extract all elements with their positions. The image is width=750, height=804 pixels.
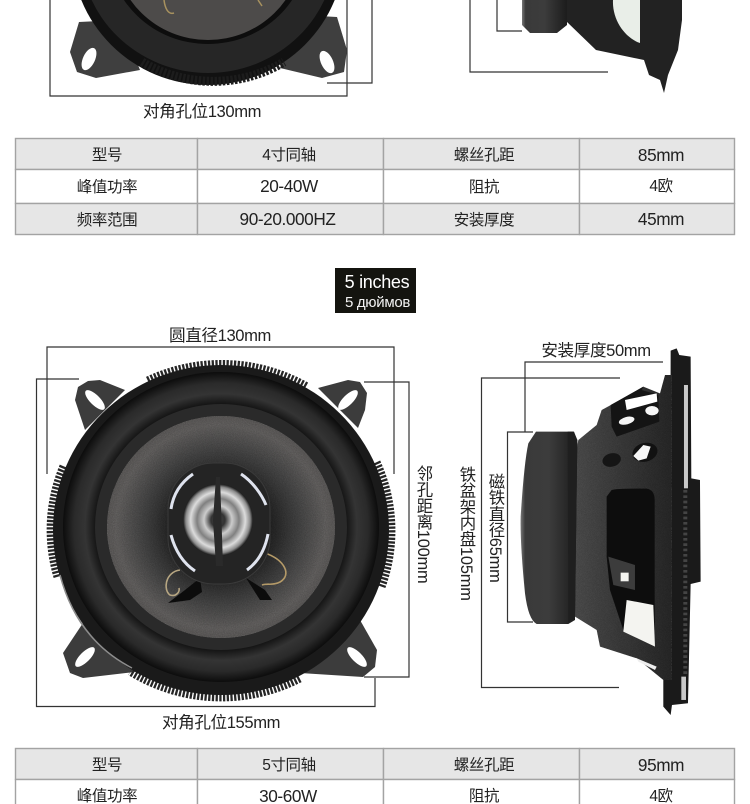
label: 对角孔位155mm: 对角孔位155mm [162,713,280,732]
icon: flange highlights [681,385,688,700]
label: 邻孔距离100mm: 邻孔距离100mm [414,465,433,583]
icon: textured cone [107,416,335,638]
table row 2: 峰值功率 [77,178,137,196]
table row 3: 频率范围 [77,211,137,229]
icon: flange [663,348,701,715]
table row 1: 5寸同轴 [262,756,316,774]
table row 1: 型号 [92,756,122,774]
heading badge: 5 inches [335,268,416,313]
table row 2: 20-40W [260,176,319,196]
table row 3: 安装厚度 [454,211,514,229]
table row 2: 4欧 [649,177,673,195]
table row 1: 95mm [638,755,684,775]
icon: tweeter dome [183,484,253,556]
icon: mounting ears [70,15,347,78]
icon: basket openings [601,387,660,670]
table row 3: 90-20.000HZ [240,209,335,229]
icon: terminal wires [164,0,262,13]
table row 1 [16,748,734,780]
icon: mounting holes [72,387,370,670]
side view speaker: 5 inch [521,348,701,715]
table row 1: 85mm [638,145,684,165]
icon: tweeter bar [213,477,223,566]
table row 1: 螺丝孔距 [454,146,514,164]
dimension lines: side view [482,362,663,688]
icon: magnet [522,0,567,33]
icon: mounting ears [63,380,377,678]
label: 磁铁直径65mm: 磁铁直径65mm [486,473,505,583]
heading badge: 5 inches: 5 дюймов [345,294,410,311]
spec table: 4 inch [16,138,734,234]
table row 2 [16,780,734,804]
top side view (cropped) [522,0,682,93]
icon: magnet [521,432,577,624]
front view speaker: 5 inch [50,363,392,698]
icon: mounting holes [78,46,338,75]
label: 安装厚度50mm: 安装厚度50mm [541,341,651,360]
icon: rubber surround [63,372,379,682]
icon: ribbed flange [679,490,691,677]
table row 3: 45mm [638,209,684,229]
dimension lines: top speaker [50,0,608,96]
icon: tweeter highlights [171,474,268,571]
table row 1: 型号 [92,146,122,164]
table row 2 [16,170,734,204]
icon: cone collar [95,404,347,650]
icon: basket [572,375,671,680]
table row 3 [16,204,734,234]
dimension lines: front view [36,347,409,706]
spec table: 5 inch [16,748,734,804]
icon: rim highlight [60,575,132,668]
heading badge: 5 inches: 5 inches [345,272,410,292]
table row 1: 螺丝孔距 [454,756,514,774]
top speaker front view (cropped) [70,0,347,85]
label: 圆直径130mm: 圆直径130mm [169,326,271,345]
icon: terminal wires [166,553,286,603]
table row 1: 4寸同轴 [262,146,316,164]
icon: basket opening [613,0,640,43]
icon: side basket [567,0,682,93]
table row 1 [16,138,734,170]
icon: speaker body [71,0,345,85]
icon: frame rim [53,365,389,695]
icon: tweeter housing [168,463,270,584]
label: 铁盆架内盘105mm: 铁盆架内盘105mm [457,466,476,601]
table row 2: 阻抗 [469,178,499,196]
label: 对角孔位130mm: 对角孔位130mm [143,102,261,121]
icon: ribbed rim edges [50,363,392,698]
